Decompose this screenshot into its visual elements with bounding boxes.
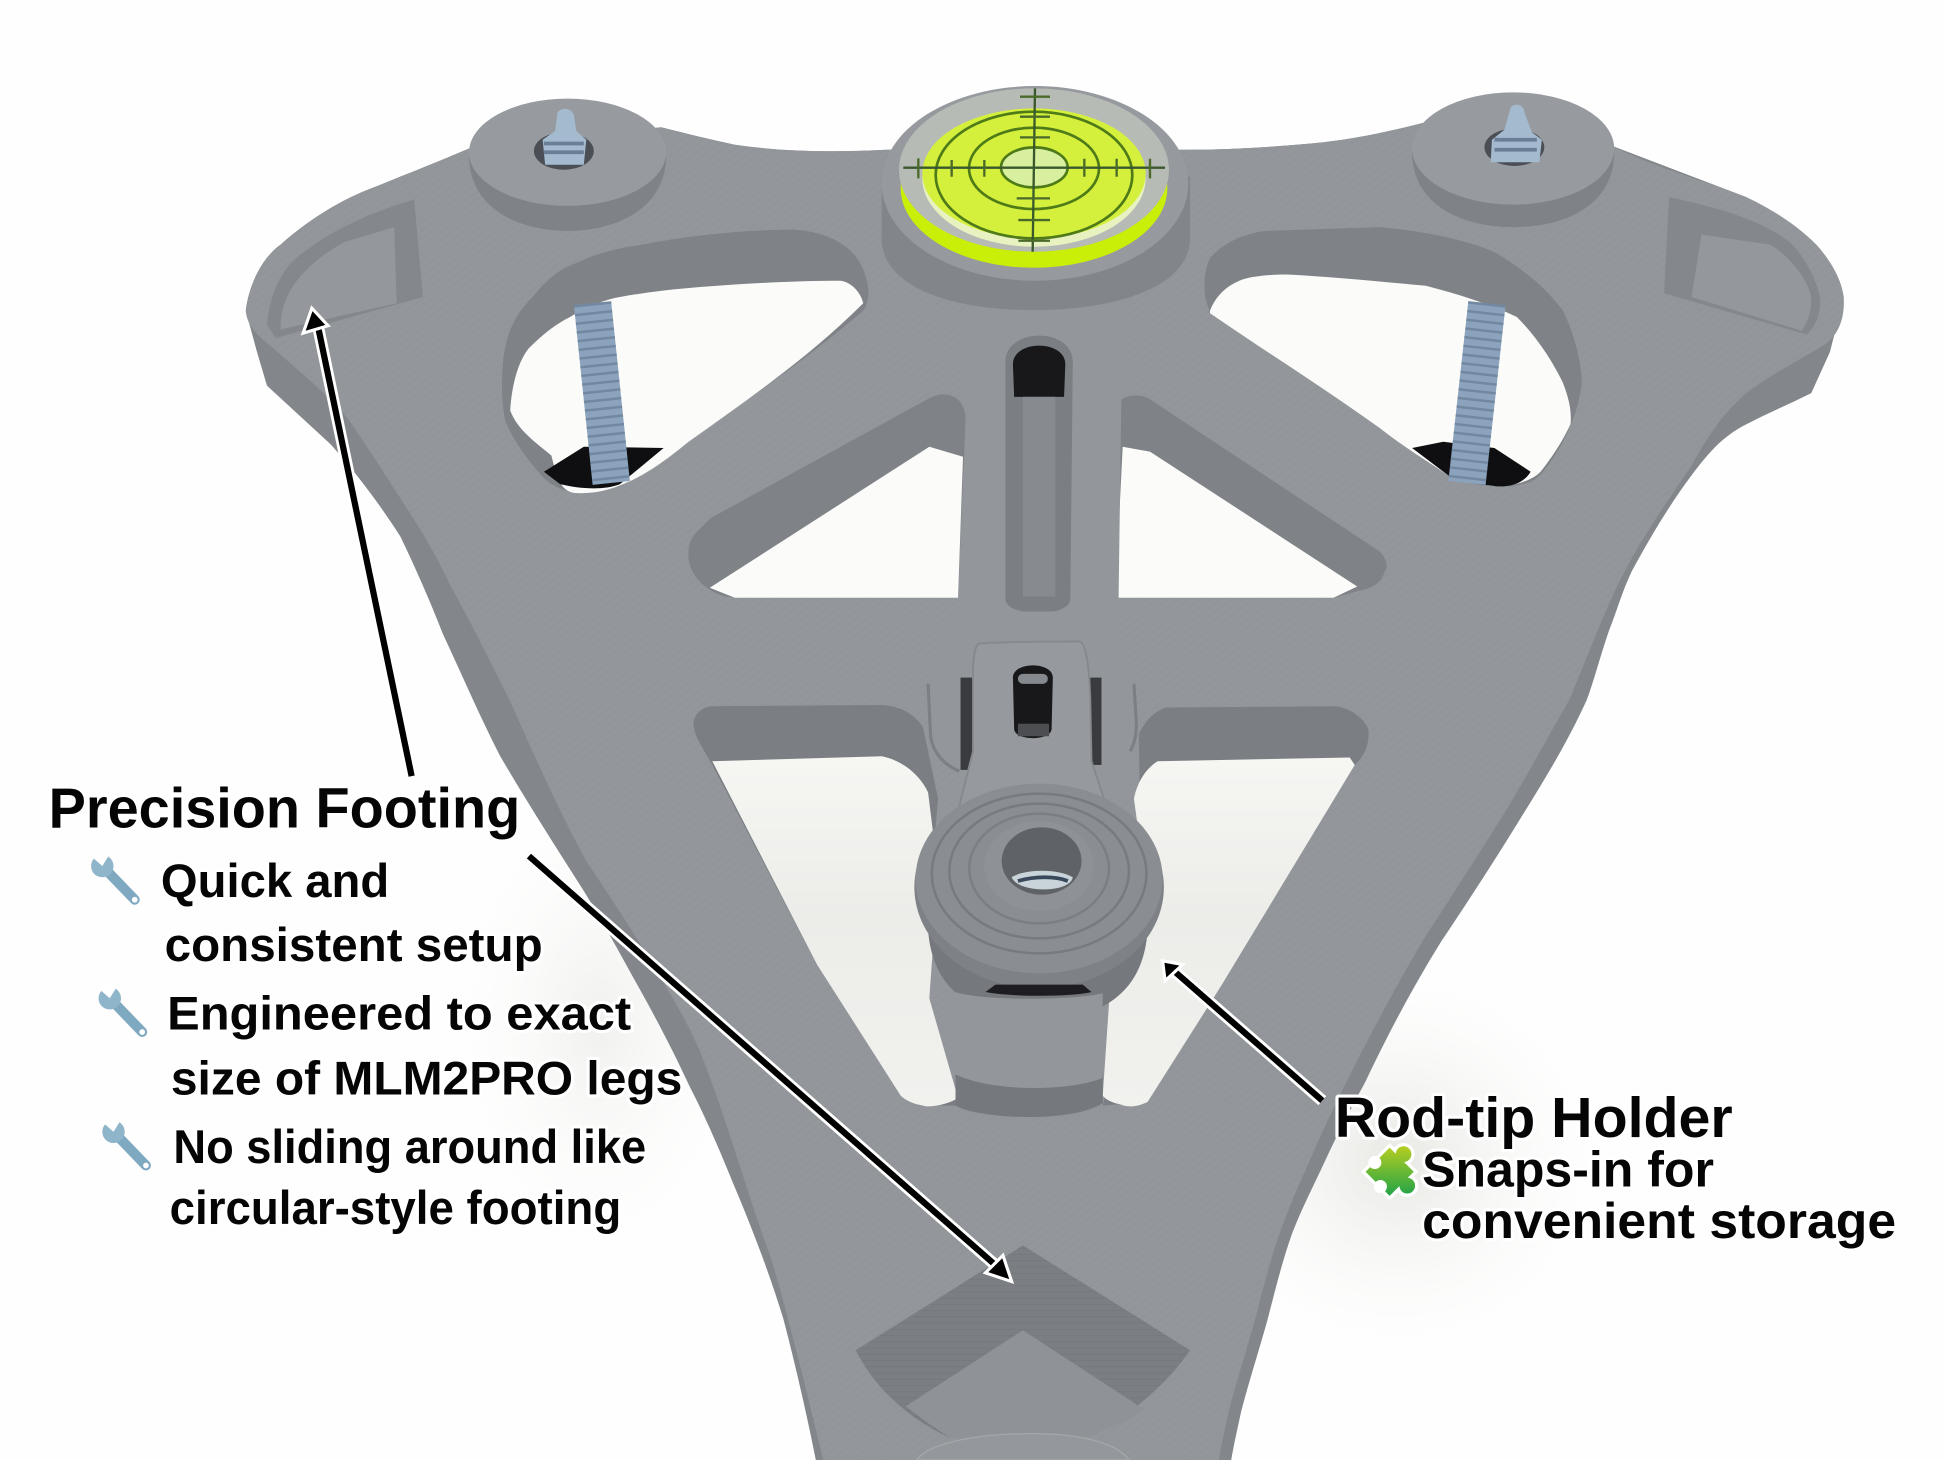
snap-in tab [956,985,1103,1117]
right large hole [1205,227,1582,487]
right corner pocket [1664,197,1820,334]
body text: snaps-in for convenient storage: Snaps-in for [1422,1142,1714,1198]
body text: snaps-in for convenient storage: convenient storage [1422,1193,1896,1249]
icon: puzzle piece [1356,1134,1432,1210]
centre slot [1005,336,1073,613]
rod-tip clip mount [928,611,1136,811]
right mounting knob [1412,92,1614,227]
lower right hole [1103,706,1369,1106]
left mounting knob [469,99,666,231]
icon: wrench one [91,852,138,903]
printed level base plate [246,86,1844,1460]
heading: precision footing: Precision Footing [49,776,520,839]
left large hole [502,230,868,493]
icon: wrench three [102,1118,149,1168]
bullet text: no sliding around: No sliding around like [173,1121,646,1174]
adjustment knob [914,784,1164,1021]
plate top surface [246,122,1844,1460]
plate silhouette and side wall [246,122,1844,1460]
arrow: to centre footing pocket [529,856,1012,1282]
bullet text: no sliding around [170,1121,646,1235]
body text: snaps-in for convenient storage [1422,1142,1896,1249]
bullet text: no sliding around: circular-style footing [170,1182,621,1235]
footing pocket [856,1245,1190,1460]
bullet text: engineered to exact size: size of MLM2PRO legs [171,1052,682,1105]
lower left hole [694,705,958,1106]
callout: rod-tip holder [1335,1086,1896,1249]
right triangular hole [1115,395,1387,598]
arrow: to rod-tip holder [1163,961,1322,1101]
callout: precision footing [49,776,682,1235]
centre rib [961,299,1123,661]
bullet text: engineered to exact size [167,987,682,1105]
bullet text: quick and consistent setup: consistent setup [165,919,543,972]
left corner pocket [267,200,423,338]
heading: rod-tip holder: Rod-tip Holder [1335,1086,1733,1149]
bullet text: quick and consistent setup: Quick and [161,855,389,908]
left triangular hole [688,394,966,598]
icon: wrench two [99,985,145,1035]
bullet text: quick and consistent setup [161,855,543,972]
bullet text: engineered to exact size: Engineered to exact [167,987,631,1040]
circular bubble level [882,86,1190,310]
arrow: to corner footing pocket [303,308,412,776]
